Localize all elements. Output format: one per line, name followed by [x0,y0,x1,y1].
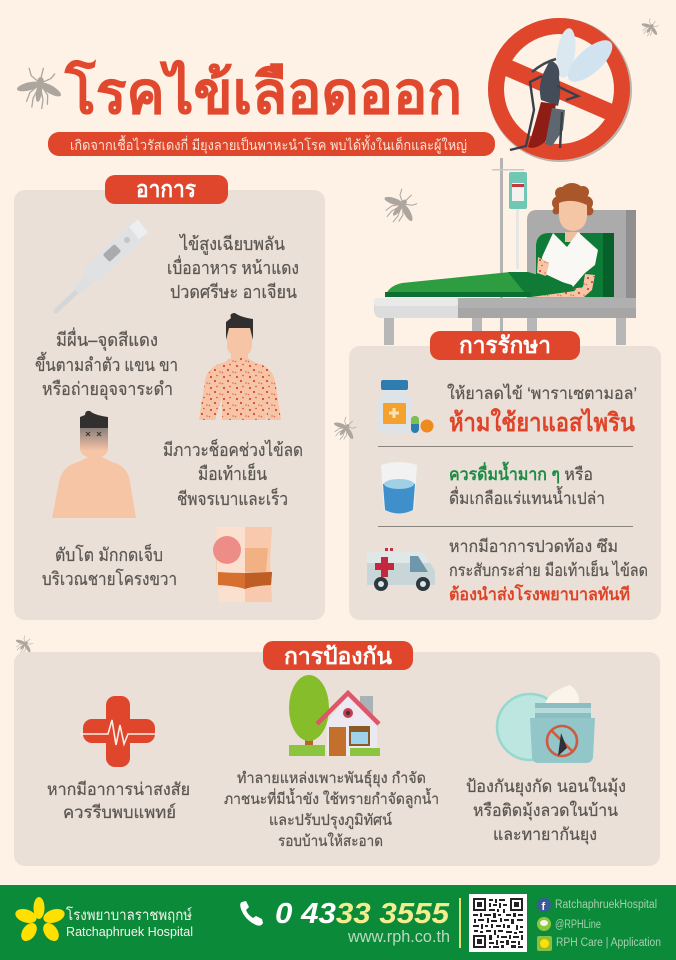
text: drink water [449,461,605,508]
text: rash symptoms [35,327,178,400]
icon: tree and house [289,675,380,756]
heading: prevention: การป้องกัน [284,643,392,669]
icon: abdomen [213,527,272,602]
text: rash symptoms: หรือถ่ายอุจจาระดำ [42,379,173,400]
icon: mosquito between panels [328,412,362,446]
footer bar [0,885,676,960]
text: destroy breeding sites: ทำลายแหล่งเพาะพันธุ์ยุง กำจัด [237,770,426,788]
icon: line [537,917,551,931]
text: app name: RPH Care | Application [556,937,661,949]
text: fever symptoms: ปวดศรีษะ อาเจียน [170,282,297,302]
text: fever symptoms: เบื่ออาหาร หน้าแดง [167,255,299,278]
title: โรคไข้เลือดออก [65,60,462,126]
icon: medicine bottle and pills [378,380,434,433]
heading: treatment: การรักษา [459,332,551,358]
text: urgent care: หากมีอาการปวดท้อง ซึม [449,537,618,556]
icon: man with rash [199,313,281,420]
text: liver symptoms [42,543,177,589]
text: fever symptoms: ไข้สูงเฉียบพลัน [178,233,285,255]
text: hospital name: โรงพยาบาลราชพฤกษ์ [66,906,192,924]
icon: patient in hospital bed [374,158,636,345]
heading: prevention [263,641,413,670]
panel: prevention [14,652,660,866]
heading: symptoms [105,175,228,204]
icon: mosquito above prevention [11,632,37,658]
text: prevent bites: ป้องกันยุงกัด นอนในมุ้ง [466,776,626,797]
icon: app [537,936,552,951]
text: fever medication: ให้ยาลดไข้ ‘พาราเซตามอล’ [447,383,637,403]
icon: facebook: f [542,901,546,913]
text: prevent bites: และทายากันยุง [493,825,597,845]
panel: treatment [349,346,661,620]
text: prevent bites: หรือติดมุ้งลวดในบ้าน [473,800,618,821]
text: shock symptoms: มือเท้าเย็น [198,462,267,484]
text: rash symptoms: ขึ้นตามลำตัว แขน ขา [35,352,178,375]
text: hospital name [66,906,193,939]
text: destroy breeding sites: ภาชนะที่มีน้ำขัง ใช้ทรายกำจัดลูกน้ำ [224,788,439,808]
text: drink water: ควรดื่มน้ำมาก ๆ หรือ [449,461,593,484]
icon: mosquito top right [637,15,663,41]
text: shock symptoms [163,438,303,509]
text: fever medication [447,383,637,437]
text: liver symptoms: ตับโต มักกดเจ็บ [55,543,163,565]
icon: hospital flower logo [14,897,66,944]
text: rash symptoms: มีผื่น–จุดสีแดง [56,327,158,351]
text: destroy breeding sites: และปรับปรุงภูมิทัศน์ [269,812,392,830]
heading: symptoms: อาการ [136,176,197,202]
text: urgent care: ต้องนำส่งโรงพยาบาลทันที [449,584,630,604]
text: fever symptoms [167,233,299,302]
panel: symptoms [14,190,325,620]
icon: man in shock [52,411,136,518]
text: line id: @RPHLine [555,919,601,931]
icon: no mosquito sign [496,26,624,154]
icon: mosquito left of title [13,65,66,111]
text: shock symptoms: ชีพจรเบาและเร็ว [177,487,288,509]
icon: ambulance [367,548,435,591]
text: website: www.rph.co.th [347,927,450,946]
icon: glass of water [381,462,417,514]
icon: mosquito beside patient [376,182,425,231]
icon: mosquito repellent jar [497,685,595,763]
subtitle banner [48,132,495,156]
icon: thermometer [56,226,143,311]
text: prevent bites [466,776,626,845]
icon: medical cross [80,696,157,767]
text: drink water: ดื่มเกลือแร่แทนน้ำเปล่า [449,486,605,508]
text: see a doctor: หากมีอาการน่าสงสัย [47,780,190,799]
text: facebook name: RatchaphruekHospital [555,899,657,911]
text: shock symptoms: มีภาวะช็อคช่วงไข้ลด [163,438,303,460]
subtitle banner: เกิดจากเชื้อไวรัสเดงกี่ มียุงลายเป็นพาหะนำโรค พบได้ทั้งในเด็กและผู้ใหญ่ [70,135,467,154]
heading: treatment [430,331,580,360]
text: destroy breeding sites [224,770,439,850]
text: see a doctor: ควรรีบพบแพทย์ [63,803,176,822]
text: fever medication: ห้ามใช้ยาแอสไพริน [449,407,635,437]
text: liver symptoms: บริเวณชายโครงขวา [42,568,177,589]
text: destroy breeding sites: รอบบ้านให้สะอาด [278,832,383,850]
text: hospital name: Ratchaphruek Hospital [66,924,193,939]
text: phone number: 0 4333 3555 [275,898,450,930]
QR code [469,894,527,952]
text: urgent care [449,537,648,604]
text: see a doctor [47,780,190,822]
icon: facebook [537,898,551,913]
icon: phone [240,901,263,926]
